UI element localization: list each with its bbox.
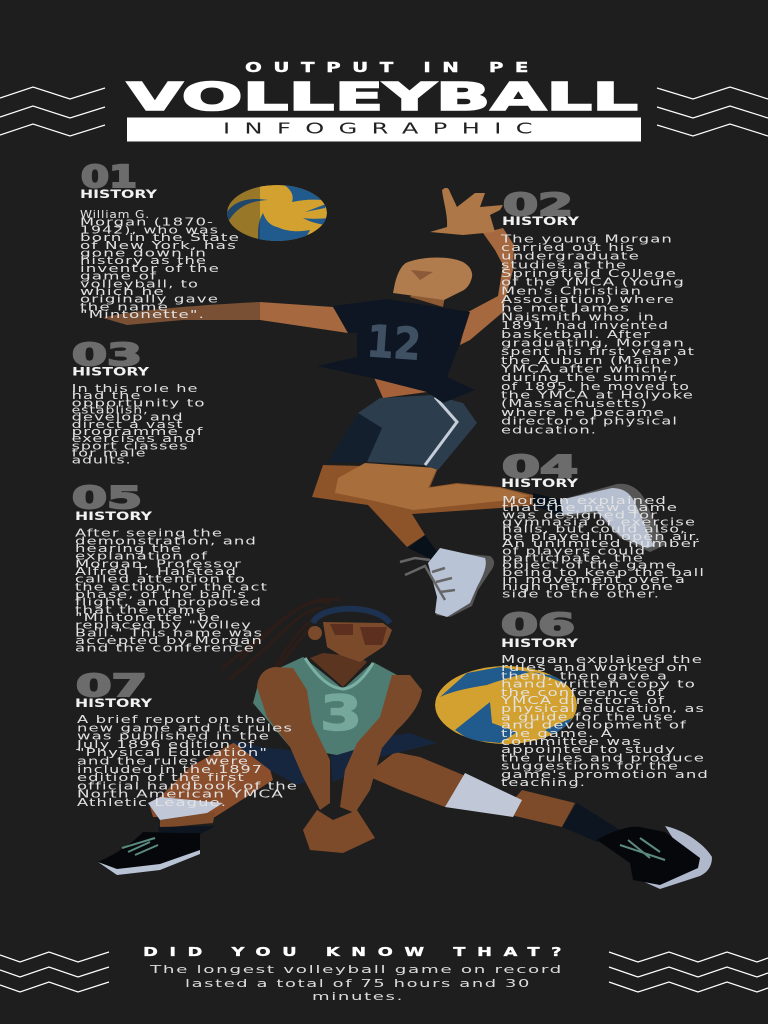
body text: Alfred T. Halstead <box>75 567 237 578</box>
right arm <box>340 675 422 813</box>
subtitle bar: infographic <box>127 118 641 142</box>
panel: section 04 <box>501 450 705 600</box>
body text: of the YMCA (Young <box>501 278 685 289</box>
body text: accepted by Morgan <box>75 636 263 647</box>
body text: inventor of the <box>80 264 220 275</box>
number 03: 03 <box>72 338 142 373</box>
jersey number 3: 3 <box>320 686 362 742</box>
illustration: small volleyball <box>225 184 330 243</box>
body text: Springfield College <box>501 269 677 280</box>
front shoe <box>400 548 494 617</box>
body text: develop and <box>72 413 184 424</box>
body text: called attention to <box>75 575 246 586</box>
body text: them, then gave a <box>501 671 668 682</box>
number 04: 04 <box>502 450 578 485</box>
heading: HISTORY <box>75 509 153 523</box>
body text: teaching. <box>501 778 586 789</box>
body text: and development of <box>501 721 687 732</box>
sock <box>408 535 438 560</box>
body text: in movement over a <box>502 575 686 586</box>
left shoe <box>98 832 200 875</box>
body text: carried out his <box>501 243 635 254</box>
body text: undergraduate <box>501 252 640 263</box>
raised hand <box>430 188 503 235</box>
body text <box>80 210 240 321</box>
raised arm <box>460 228 514 345</box>
back leg <box>312 465 533 547</box>
body text: establish, <box>72 406 149 416</box>
body text: demonstration, and <box>75 536 257 547</box>
body text: adults. <box>72 456 132 466</box>
body text: Morgan explained <box>502 496 667 507</box>
body text: director of physical <box>501 417 678 428</box>
body text: the Auburn (Maine) <box>501 356 680 367</box>
body text: education. <box>501 425 597 436</box>
body text <box>499 234 695 436</box>
eyebrow: output in PE: OUTPUT IN PE <box>245 60 540 76</box>
body text: gymnasia or exercise <box>502 518 696 528</box>
body text: phase, of the ball's <box>75 590 247 601</box>
body text: 1942), who was <box>80 225 219 236</box>
body text: Association) where <box>501 295 675 306</box>
footer text: minutes. <box>312 990 404 1003</box>
body text: July 1896 edition of <box>75 740 255 751</box>
body text: Naismith who, in <box>501 312 655 323</box>
body text <box>75 529 268 655</box>
body text: YMCA directors of <box>499 696 665 707</box>
body text: the rules and produce <box>501 753 705 764</box>
body text: explanation of <box>75 552 208 563</box>
left knee pad <box>148 797 223 820</box>
body text: William G. <box>80 210 150 221</box>
illustration: large volleyball <box>435 666 577 744</box>
body text: halls, but could also, <box>502 525 686 536</box>
body text: game's promotion and <box>501 770 709 781</box>
icon: zigzag lines bottom left <box>0 952 109 992</box>
body text: flight, and proposed <box>75 598 262 609</box>
header <box>127 60 641 142</box>
hands <box>303 810 375 853</box>
body text: the YMCA at Holyoke <box>501 390 694 402</box>
body text: Men's Christian <box>501 286 642 297</box>
body text: gone down in <box>80 248 207 260</box>
body text: new game and its rules <box>77 723 293 734</box>
body text: the conference of <box>501 688 664 699</box>
right leg thigh <box>365 752 468 807</box>
jersey <box>253 657 397 755</box>
body text: rules and worked on <box>501 663 689 674</box>
right lower leg <box>502 790 575 827</box>
body text: participate, the <box>502 554 644 564</box>
shadow overlay dimming the left of the top area <box>55 155 260 333</box>
body text: basketball. After <box>501 330 651 341</box>
body text: of 1895, he moved to <box>501 382 690 393</box>
body text: that the name <box>75 605 207 616</box>
left arm <box>257 667 330 810</box>
right knee pad <box>445 773 522 817</box>
body text: be played in open air. <box>502 532 701 543</box>
body text: Morgan explained the <box>501 655 703 666</box>
heading: HISTORY <box>501 476 579 490</box>
body text: originally gave <box>80 295 219 306</box>
left sock <box>158 826 215 842</box>
heading: HISTORY <box>501 636 579 650</box>
body text: of New York, has <box>80 241 237 252</box>
number 02: 02 <box>503 188 573 223</box>
body text: history as the <box>80 256 207 267</box>
heading: HISTORY <box>502 214 580 228</box>
footer heading: DID YOU KNOW THAT? <box>143 944 573 959</box>
belly <box>372 373 427 398</box>
body text: where he became <box>501 408 665 419</box>
body text: "Mintonette" be <box>75 613 221 624</box>
panel: section 03 <box>72 338 206 466</box>
body text: replaced by "Volley <box>75 621 252 632</box>
body text: and the conference <box>75 644 255 655</box>
body text: the name <box>80 302 169 313</box>
body text: side to the other. <box>502 589 660 600</box>
footer text: lasted a total of 75 hours and 30 <box>185 977 531 990</box>
body text: the action, or the act <box>75 582 268 593</box>
body text: North American YMCA <box>77 790 284 801</box>
body text: spent his first year at <box>501 347 695 358</box>
body text: was published in the <box>77 732 270 743</box>
right sock <box>562 803 620 842</box>
body text: committee was <box>501 737 642 748</box>
shorts <box>327 395 477 470</box>
body text: Morgan (1870- <box>80 218 214 229</box>
icon: zigzag lines top right <box>657 87 768 136</box>
body text: 1891, had invented <box>501 321 669 332</box>
shirt <box>317 299 475 403</box>
body text: game of <box>80 272 157 283</box>
body text: Athletic League. <box>77 798 227 809</box>
body text: Morgan, Professor <box>75 559 242 570</box>
icon: zigzag lines top left <box>0 87 105 136</box>
body text: a guide for the use <box>501 712 674 723</box>
number 06: 06 <box>501 608 575 643</box>
subtitle bar: infographic: INFOGRAPHIC <box>223 120 547 138</box>
illustration: jumping player <box>103 188 665 617</box>
body text: and the rules were <box>77 756 249 768</box>
body text: "Mintonette". <box>80 310 205 321</box>
body text: (Massachusetts) <box>501 399 648 410</box>
number 05: 05 <box>72 481 142 516</box>
panel: section 07 <box>75 669 298 809</box>
body text: volleyball, to <box>80 279 199 290</box>
footer: did you know <box>143 944 573 1003</box>
body text <box>75 715 298 809</box>
hair <box>222 599 340 705</box>
body text: hand-written copy to <box>501 680 696 691</box>
body text: of players could <box>502 546 646 557</box>
body text: being to keep the ball <box>502 568 705 579</box>
body text: direct a vast <box>72 420 184 431</box>
body text: exercises and <box>72 434 196 445</box>
heading: HISTORY <box>80 187 158 201</box>
body text: The young Morgan <box>499 234 673 245</box>
body text: had the <box>72 391 142 402</box>
body text: hearing the <box>75 544 182 555</box>
heading: HISTORY <box>72 365 150 379</box>
body text: studies at the <box>501 260 627 271</box>
body text: YMCA after which, <box>499 364 669 376</box>
body text: born in the State <box>80 233 240 244</box>
heading: HISTORY <box>75 696 153 710</box>
body text: during the summer <box>501 373 677 384</box>
body text: suggestions for the <box>501 762 679 773</box>
face <box>308 622 392 662</box>
jersey number 12: 12 <box>365 316 422 371</box>
body text: An unlimited number <box>502 539 700 550</box>
number 07: 07 <box>76 669 147 704</box>
extended arm <box>103 302 348 333</box>
panel: section 05 <box>72 481 268 655</box>
body text: In this role he <box>72 384 199 395</box>
footer text: The longest volleyball game on record <box>148 963 563 976</box>
body text: sport classes <box>72 441 189 452</box>
body text: he met James <box>501 304 630 315</box>
head <box>393 258 472 307</box>
body text: programme of <box>72 427 204 438</box>
body text: opportunity to <box>72 398 206 409</box>
body text <box>502 496 705 600</box>
body text <box>72 384 206 466</box>
body text: high net, from one <box>502 582 674 593</box>
leg highlight <box>335 463 530 510</box>
body text: was designed for <box>502 510 658 521</box>
neck <box>310 653 367 687</box>
body text: After seeing the <box>75 529 223 540</box>
title: volleyball: VOLLEYBALL <box>127 75 638 120</box>
panel: section 02 <box>499 188 695 436</box>
shorts <box>230 733 437 785</box>
body text: for male <box>72 448 147 459</box>
panel: section 01 <box>80 160 240 321</box>
body text: appointed to study <box>501 745 676 756</box>
body text <box>499 655 709 789</box>
headband <box>313 609 390 623</box>
body text: official handbook of the <box>77 781 298 792</box>
body text: the game. A <box>501 729 613 740</box>
body text: object of the game <box>502 561 677 572</box>
left thigh <box>150 743 273 817</box>
body text: edition of the first <box>77 773 245 784</box>
body text: Ball." This name was <box>75 628 263 639</box>
body text: which he <box>80 287 165 298</box>
body text: included in the 1897 <box>77 765 263 776</box>
left lower leg <box>160 812 215 828</box>
footer text <box>148 963 563 1003</box>
body text: A brief report on the <box>77 715 267 726</box>
panel: section 06 <box>499 608 709 789</box>
icon: zigzag lines bottom right <box>609 952 768 992</box>
body text: "Physical Education" <box>77 748 268 759</box>
illustration: digging player <box>98 599 712 889</box>
body text: physical education, as <box>501 704 705 715</box>
right shoe <box>597 826 712 889</box>
body text: that the new game <box>502 503 678 514</box>
number 01: 01 <box>81 160 137 195</box>
body text: graduating, Morgan <box>501 338 685 350</box>
rear shoe <box>533 484 665 552</box>
